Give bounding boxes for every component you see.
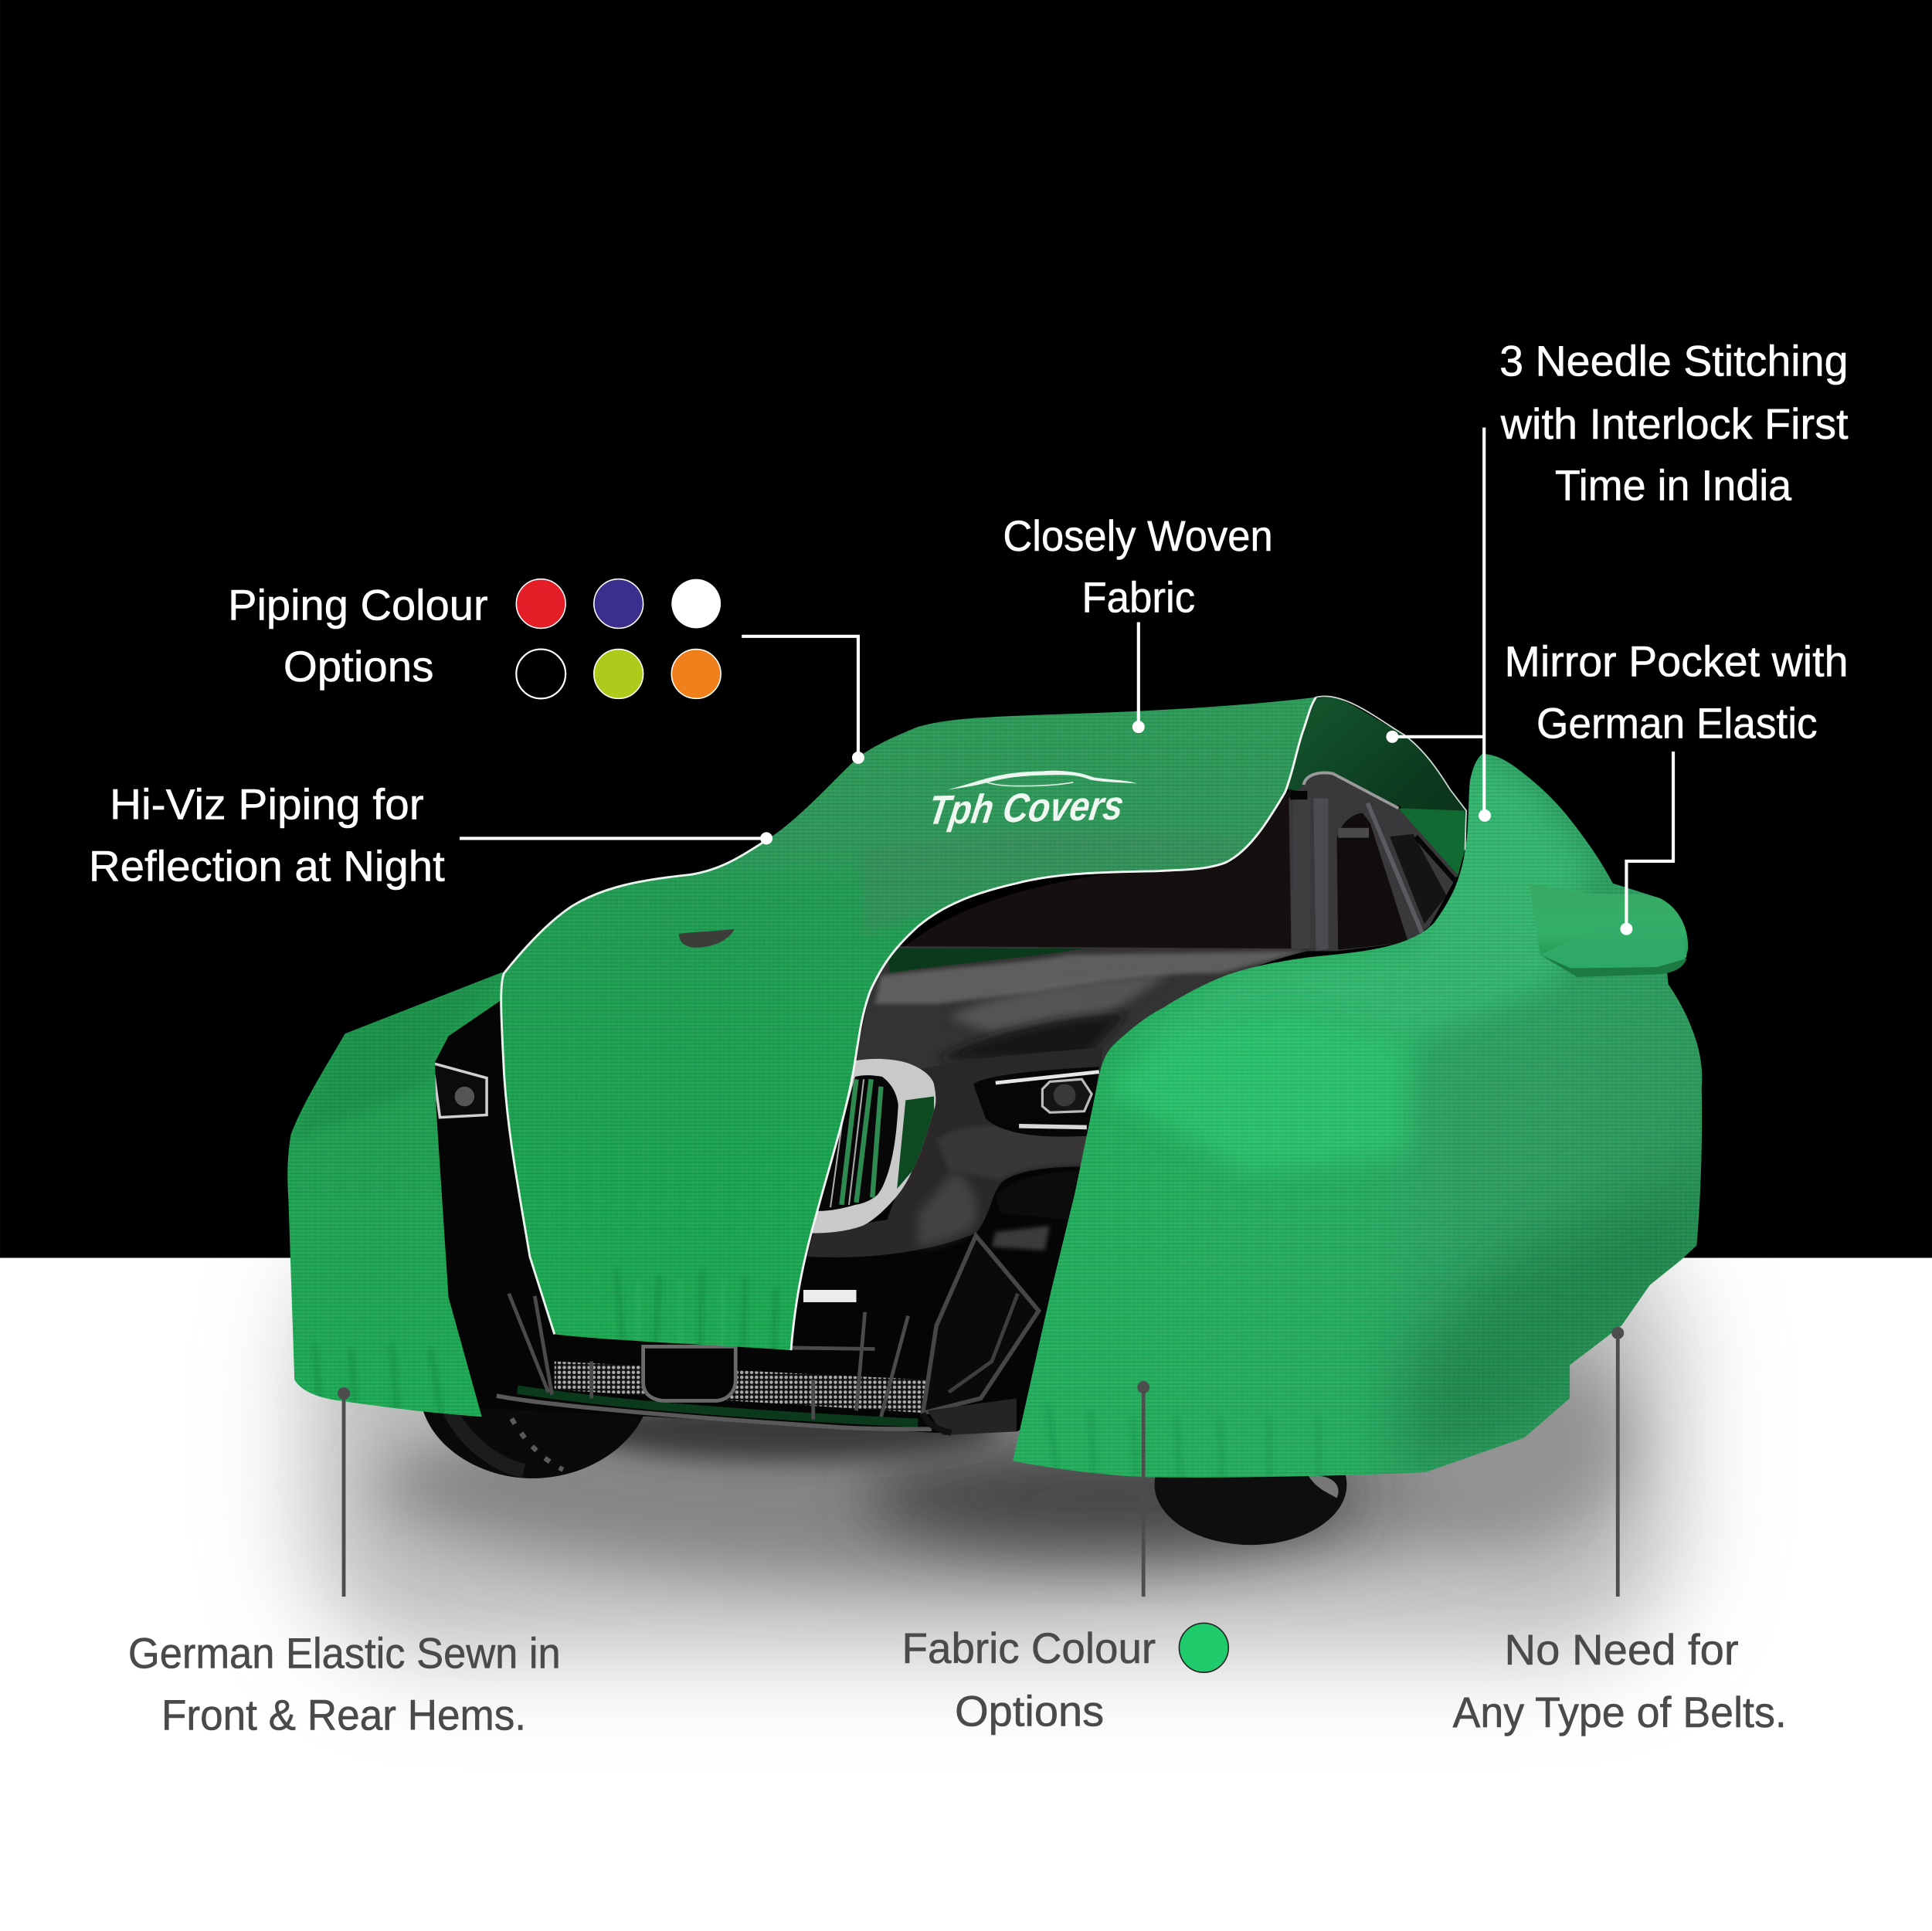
- callout: mirror pocket: Mirror Pocket with: [1505, 637, 1849, 686]
- flap piping: [1316, 696, 1466, 850]
- callout: 3 needle stitching: Time in India: [1555, 461, 1792, 510]
- lighter green rear of the cover: [1398, 808, 1466, 877]
- callout: german elastic hems: Front & Rear Hems.: [161, 1690, 526, 1739]
- callout: hi-viz piping: Hi-Viz Piping for: [110, 780, 424, 829]
- cover panel: right fender and door: [1010, 739, 1713, 1491]
- windshield: [899, 789, 1306, 951]
- left headlight: [433, 1063, 487, 1118]
- callout: 3 needle stitching: with Interlock First: [1500, 399, 1849, 448]
- callout: 3 needle stitching: 3 Needle Stitching: [1499, 336, 1849, 385]
- callout: german elastic hems: [128, 1387, 561, 1739]
- icon: small shield badge: [679, 929, 735, 948]
- callout: hi-viz piping: [89, 780, 772, 890]
- background: black upper area: [0, 0, 1932, 1257]
- callout: closely woven fabric: Fabric: [1081, 573, 1195, 622]
- callout: closely woven fabric: Closely Woven: [1003, 511, 1273, 560]
- car body base: [435, 961, 1109, 1433]
- inner flap of the cover: [1282, 696, 1466, 872]
- callout: fabric colour options: [902, 1381, 1228, 1736]
- car wheels: [422, 1403, 1346, 1545]
- callout: no need for belts: Any Type of Belts.: [1453, 1688, 1787, 1736]
- background: white floor: [0, 1257, 1932, 1931]
- callout: piping colour options: [228, 579, 864, 764]
- ground shadow under the car: [308, 1232, 1676, 1651]
- callout: german elastic hems: German Elastic Sewn in: [128, 1629, 561, 1678]
- cover panel: left fender: [284, 961, 505, 1429]
- callout: piping colour options: Piping Colour: [228, 580, 488, 629]
- right headlight: [973, 1067, 1099, 1137]
- callout: closely woven fabric: [1003, 511, 1273, 733]
- callout: fabric colour options: Fabric Colour: [902, 1624, 1156, 1672]
- cover panel: centre hood and roof with piping: [493, 690, 1331, 1355]
- callout: mirror pocket: German Elastic: [1536, 698, 1818, 747]
- cover panel: mirror pocket: [1529, 884, 1688, 977]
- callout: piping colour options: Options: [284, 642, 433, 691]
- hood: [856, 946, 1318, 1088]
- callout: no need for belts: No Need for: [1505, 1625, 1739, 1674]
- kidney grille: [811, 1059, 935, 1234]
- callout: mirror pocket: [1505, 637, 1849, 935]
- logo: Tph Covers: Tph Covers: [925, 783, 1126, 833]
- callout: hi-viz piping: Reflection at Night: [89, 841, 445, 890]
- callout: no need for belts: [1453, 1327, 1787, 1736]
- A-pillar, roof and side windows: [1289, 773, 1458, 951]
- callout: 3 needle stitching: [1386, 336, 1849, 822]
- front bumper upper body: [807, 1069, 1099, 1257]
- callout: fabric colour options: Options: [955, 1687, 1104, 1736]
- lower intake, mesh and lip: [497, 1236, 1039, 1435]
